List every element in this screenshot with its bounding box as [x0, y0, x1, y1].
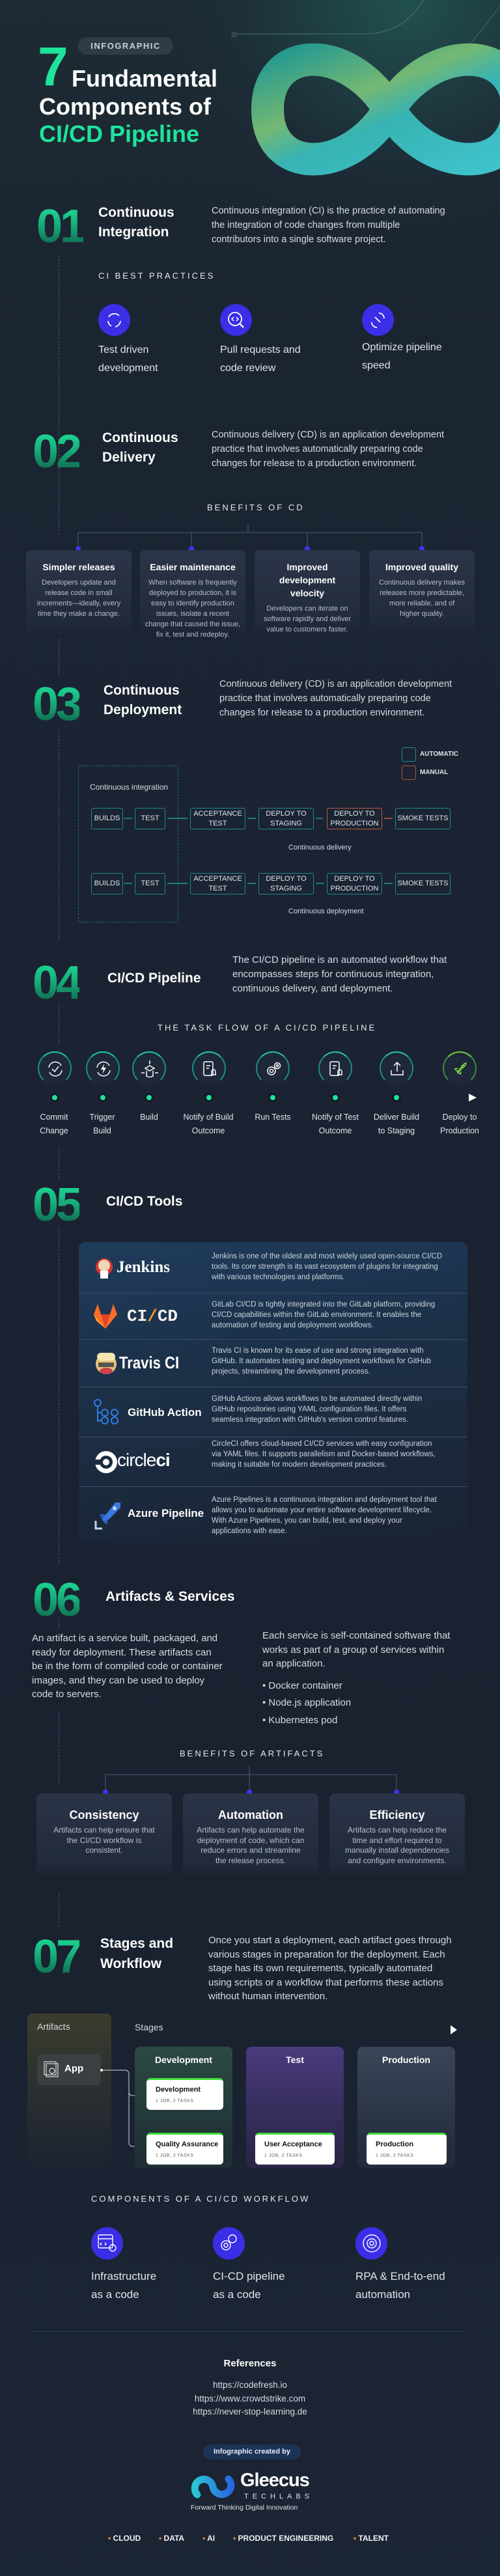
references: [193, 2358, 307, 2417]
title: Components of: [39, 93, 211, 120]
section 03 heading: Deployment: [104, 702, 182, 717]
components of CI/CD workflow: as a code: [213, 2288, 261, 2301]
tool: azure: With Azure Pipelines, you can build, test, and deploy your: [212, 1517, 402, 1525]
stage: test: Test: [286, 2055, 304, 2065]
pipeline diagram: STAGING: [270, 884, 302, 892]
section 04 heading: 04: [33, 957, 79, 1009]
tool: jenkins: [79, 1242, 467, 1294]
card: easier maintenance: Easier maintenance: [150, 562, 236, 572]
pipeline diagram: BUILDS: [94, 814, 120, 822]
task flow: [38, 1023, 477, 1102]
tool: travis: Travis CI is known for its ease of use and strong integration with: [212, 1347, 424, 1355]
section 07 heading: stage has its own requirements, typically automated: [208, 1963, 432, 1974]
section 04 heading: CI/CD Pipeline: [107, 971, 201, 986]
task flow labels: Notify of Test: [312, 1113, 359, 1122]
task flow: THE TASK FLOW OF A CI/CD PIPELINE: [158, 1023, 376, 1032]
services text: • Docker container: [262, 1680, 342, 1691]
card: easier maintenance: deployed to production, it is: [149, 589, 236, 597]
card: consistency: Artifacts can help ensure that the CI/CD workflow is consistent.: [53, 1825, 155, 1855]
tools panel: [79, 1242, 467, 1543]
section 03 heading: Continuous: [104, 683, 180, 698]
card: velocity: Developers can iterate on: [266, 605, 348, 613]
card: quality: Continuous delivery makes: [379, 579, 465, 587]
section 07 heading: 07: [33, 1931, 79, 1983]
icon: RPA: [355, 2227, 387, 2260]
task flow labels: Deploy to: [443, 1113, 477, 1122]
card: efficiency: Efficiency: [369, 1808, 425, 1821]
card: velocity: software rapidly and deliver: [264, 615, 351, 623]
credit pill: Infographic created by: [214, 2448, 290, 2456]
pipeline diagram: PRODUCTION: [331, 819, 378, 827]
services text: • Kubernetes pod: [262, 1715, 337, 1725]
tool: circleci: via YAML files. It supports parallelism and Docker-based workflows,: [212, 1450, 436, 1458]
card: simpler releases: Developers update and: [42, 579, 116, 587]
section 07 heading: Once you start a deployment, each artifact goes through: [208, 1935, 452, 1946]
section 02 heading: Continuous delivery (CD) is an application development: [212, 430, 444, 440]
card: efficiency: Artifacts can help reduce the time and effort required to manually install dependencies and configure environments.: [345, 1825, 449, 1865]
references: https://never-stop-learning.de: [193, 2407, 307, 2417]
CI best practices: [98, 271, 442, 374]
icons: [38, 1051, 72, 1085]
logo: gleecus: Forward Thinking Digital Innovation: [191, 2504, 298, 2512]
artifacts text: An artifact is a service built, packaged, and: [32, 1633, 217, 1644]
stages diagram: Stages: [135, 2022, 163, 2032]
card: consistency: [36, 1794, 172, 1876]
CI best practices: Test driven: [98, 344, 148, 355]
tool: circleci: [79, 1437, 467, 1487]
pipeline diagram: TEST: [141, 814, 160, 822]
app box: [37, 2054, 101, 2085]
section 02 heading: Continuous: [102, 430, 178, 445]
icon: pipeline as code: [213, 2227, 245, 2260]
timeline: [469, 1094, 477, 1101]
legend: MANUAL: [420, 769, 448, 776]
CI best practices: speed: [362, 360, 391, 371]
card: quality: more reliable, and of: [389, 600, 454, 607]
artifacts text: images, and they can be used to deploy: [32, 1674, 204, 1686]
card: simpler releases: time they make a change.: [38, 610, 120, 618]
title: [38, 36, 217, 147]
tool: azure: [95, 1496, 437, 1535]
section 04 heading: [33, 954, 447, 1009]
card: easier maintenance: When software is frequently: [148, 579, 237, 587]
tool: circleci: circleci: [117, 1450, 170, 1470]
pipeline diagram: [78, 766, 451, 922]
section 03 heading: practice that involves automatically preparing code: [219, 693, 431, 704]
stage: test: [246, 2047, 344, 2168]
pipeline diagram: Continuous delivery: [288, 844, 352, 852]
pipeline diagram: STAGING: [270, 819, 302, 827]
decorative hero lines: [231, 0, 500, 44]
tool: github action: GitHub repositories using YAML configuration files. It offers: [212, 1406, 406, 1413]
section 01 heading: [36, 201, 445, 253]
services text: works as part of a group of services within: [262, 1644, 444, 1655]
footer services: • DATA: [159, 2534, 184, 2543]
tool: github action: GitHub Action: [128, 1406, 202, 1419]
services text: Each service is self-contained software that: [262, 1630, 450, 1641]
task flow labels: Trigger: [89, 1113, 115, 1122]
tool: gitlab: CI/CD: [127, 1307, 178, 1326]
CI best practices: development: [98, 363, 158, 374]
pipeline diagram: TEST: [141, 879, 160, 887]
benefits of CD: [26, 503, 475, 639]
legend: [402, 747, 458, 780]
task flow labels: Production: [440, 1126, 479, 1135]
stages diagram: Production: [376, 2140, 413, 2148]
pipeline diagram: DEPLOY TO: [334, 875, 375, 883]
app box: App: [64, 2063, 83, 2074]
tool: github action: GitHub Actions allows workflows to be automated directly within: [212, 1395, 422, 1403]
task flow labels: Notify of Build: [183, 1113, 234, 1122]
section 02 heading: changes for release to a production environment.: [212, 458, 417, 469]
task flow labels: Commit: [40, 1113, 68, 1122]
card: easier maintenance: [140, 550, 245, 637]
artifacts text: ready for deployment. These artifacts can: [32, 1647, 212, 1657]
card: easier maintenance: easy to identify production: [151, 600, 234, 607]
card: velocity: value to customers faster.: [266, 626, 348, 633]
benefits of artifacts: BENEFITS OF ARTIFACTS: [180, 1749, 324, 1758]
section 03 heading: changes for release to a production environment.: [219, 708, 424, 718]
card: velocity: [255, 550, 360, 637]
title: 7: [38, 36, 68, 97]
footer services: • AI: [202, 2534, 215, 2543]
section 02 heading: Delivery: [102, 450, 156, 465]
CI best practices: code review: [220, 363, 275, 374]
tool: azure: allows you to automate your entire software development lifecycle.: [212, 1506, 432, 1514]
card: quality: [369, 550, 475, 637]
artifacts text: code to servers.: [32, 1689, 102, 1700]
tool: gitlab: CI/CD capabilities within the GitLab environment. It enables the: [212, 1311, 421, 1319]
stages diagram: Quality Assurance: [156, 2140, 218, 2148]
section 07 heading: Stages and: [100, 1936, 173, 1951]
hero background glow: [163, 0, 500, 241]
footer services: • CLOUD: [108, 2534, 141, 2543]
section 01 heading: contributors into a single software project.: [212, 234, 386, 245]
artifacts text: be in the form of compiled code or container: [32, 1661, 223, 1672]
card: easier maintenance: change that caused the issue,: [145, 620, 240, 628]
task flow labels: Build: [93, 1126, 111, 1135]
pipeline diagram: DEPLOY TO: [334, 810, 375, 818]
pipeline diagram: ACCEPTANCE: [193, 810, 242, 818]
references: References: [224, 2358, 276, 2369]
tool: travis: GitHub. It automates testing and deployment workflows for GitHub: [212, 1357, 431, 1365]
section 02 heading: 02: [33, 426, 79, 478]
pipeline diagram: BUILDS: [94, 879, 120, 887]
card: easier maintenance: fix it, test and redeploy.: [156, 631, 229, 639]
artifacts column: [27, 2014, 111, 2170]
pipeline diagram: Continuous deployment: [288, 907, 364, 915]
benefits of CD: BENEFITS OF CD: [207, 503, 305, 512]
section 06 heading: [33, 1574, 234, 1626]
footer services: [108, 2534, 389, 2543]
stages diagram: Artifacts: [37, 2021, 70, 2032]
section 07 heading: Workflow: [100, 1956, 161, 1971]
services text: [262, 1630, 451, 1725]
section 05 heading: 05: [33, 1179, 79, 1231]
card: simpler releases: increments—ideally, every: [37, 600, 120, 607]
tool: azure: applications with ease.: [212, 1527, 287, 1535]
components of CI/CD workflow: Infrastructure: [91, 2270, 156, 2282]
pipeline diagram: SMOKE TESTS: [397, 814, 449, 822]
card: quality: higher quality.: [400, 610, 444, 618]
icon: pull requests: [220, 304, 252, 336]
components of CI/CD workflow: [91, 2194, 445, 2301]
card: velocity: development: [279, 575, 335, 585]
section 04 heading: The CI/CD pipeline is an automated workflow that: [232, 954, 447, 965]
section 02 heading: practice that involves automatically preparing code: [212, 444, 423, 454]
pipeline diagram: DEPLOY TO: [266, 810, 307, 818]
pipeline diagram: Continuous integration: [90, 782, 168, 792]
card: quality: releases more predictable,: [380, 589, 464, 597]
card: automation: Artifacts can help automate the deployment of code, which can reduce errors and streamline the release process.: [197, 1825, 305, 1865]
section 03 heading: 03: [33, 678, 79, 730]
pipeline diagram: TEST: [208, 884, 227, 892]
artifacts text: [32, 1633, 223, 1700]
section 07 heading: using scripts or a workflow that performs these actions: [208, 1977, 443, 1988]
task flow labels: Outcome: [319, 1126, 352, 1135]
card: automation: Automation: [218, 1808, 283, 1821]
task flow labels: Outcome: [192, 1126, 225, 1135]
tool: travis: projects, streamlining the development process.: [212, 1368, 370, 1376]
stages diagram: 1 JOB, 2 TASKS: [264, 2154, 302, 2158]
divider: [31, 2331, 467, 2332]
section 01 heading: the integration of code changes from multiple: [212, 220, 400, 230]
logo: gleecus: TECHLABS: [244, 2493, 313, 2500]
tool: circleci: making it suitable for modern development practices.: [212, 1461, 387, 1469]
references: https://codefresh.io: [213, 2380, 287, 2390]
card: simpler releases: [26, 550, 132, 637]
logo: gleecus: [191, 2470, 313, 2512]
components of CI/CD workflow: CI-CD pipeline: [213, 2270, 285, 2282]
CI best practices: Pull requests and: [220, 344, 301, 355]
section 01 heading: Continuous: [98, 205, 174, 220]
tag: infographic: INFOGRAPHIC: [90, 41, 161, 51]
stages diagram: User Acceptance: [264, 2140, 322, 2148]
tool: gitlab: [79, 1294, 467, 1340]
tool: jenkins: Jenkins is one of the oldest and most widely used open-source CI/CD: [212, 1253, 442, 1260]
credit pill: [203, 2444, 301, 2459]
CI best practices: CI BEST PRACTICES: [98, 271, 215, 281]
tool: gitlab: automation of testing and deployment workflows.: [212, 1322, 374, 1329]
title: Fundamental: [72, 65, 217, 92]
footer services: • TALENT: [354, 2534, 389, 2543]
card: velocity: Improved: [286, 562, 328, 572]
stages diagram: 1 JOB, 2 TASKS: [376, 2154, 414, 2158]
stages diagram: 1 JOB, 2 TASKS: [156, 2099, 194, 2103]
icon: test driven: [98, 304, 130, 336]
icon: optimize: [362, 304, 394, 336]
card: quality: Improved quality: [385, 562, 458, 572]
references: https://www.crowdstrike.com: [195, 2394, 305, 2403]
tool: jenkins: tools. Its core strength is its vast ecosystem of plugins for integrating: [212, 1263, 438, 1271]
footer services: • PRODUCT ENGINEERING: [233, 2534, 333, 2543]
section 07 heading: without human intervention.: [208, 1991, 327, 2002]
section 07 heading: various stages in preparation for the deployment. Each: [208, 1949, 445, 1960]
CI best practices: Optimize pipeline: [362, 342, 442, 353]
stages diagram: [27, 2014, 457, 2168]
tool: jenkins: with various technologies and platforms.: [212, 1273, 345, 1281]
components of CI/CD workflow: as a code: [91, 2288, 139, 2301]
section 03 heading: Continuous delivery (CD) is an application development: [219, 679, 452, 689]
section 06 heading: 06: [33, 1574, 79, 1626]
tool: gitlab: GitLab CI/CD is tightly integrated into the GitLab platform, providing: [212, 1301, 435, 1309]
components of CI/CD workflow: automation: [355, 2288, 410, 2301]
pipeline diagram: ACCEPTANCE: [193, 875, 242, 883]
stages diagram: 1 JOB, 2 TASKS: [156, 2154, 194, 2158]
card: easier maintenance: issues, isolate a recent: [156, 610, 229, 618]
stage: production: Production: [382, 2055, 430, 2065]
services text: • Node.js application: [262, 1697, 351, 1708]
card: consistency: Consistency: [69, 1808, 139, 1821]
section 01 heading: 01: [36, 201, 83, 253]
tool: circleci: CircleCI offers cloud-based CI/CD services with easy configuration: [212, 1440, 432, 1448]
stages diagram: Development: [156, 2086, 201, 2094]
section 05 heading: [33, 1179, 182, 1231]
pipeline diagram: PRODUCTION: [331, 884, 378, 892]
pipeline diagram: DEPLOY TO: [266, 875, 307, 883]
tool: azure: Azure Pipeline: [128, 1507, 204, 1519]
benefits of artifacts: [36, 1749, 465, 1866]
logo: gleecus: Gleecus: [240, 2470, 309, 2491]
card: simpler releases: release code in small: [45, 589, 113, 597]
section 04 heading: continuous delivery, and deployment.: [232, 983, 393, 994]
tool: github action: [79, 1387, 467, 1437]
section 05 heading: CI/CD Tools: [106, 1194, 182, 1209]
section 02 heading: [33, 426, 444, 478]
task flow labels: [40, 1113, 479, 1135]
tool: travis: [79, 1340, 467, 1387]
services text: an application.: [262, 1658, 326, 1669]
tag: infographic: [78, 37, 173, 55]
legend: AUTOMATIC: [420, 751, 458, 758]
task flow labels: Build: [140, 1113, 158, 1122]
pipeline diagram: TEST: [208, 819, 227, 827]
section 06 heading: Artifacts & Services: [105, 1589, 234, 1604]
hero infinity graphic: [251, 43, 500, 176]
components of CI/CD workflow: COMPONENTS OF A CI/CD WORKFLOW: [91, 2194, 310, 2204]
card: efficiency: [329, 1794, 465, 1876]
section 01 heading: Continuous integration (CI) is the practice of automating: [212, 206, 445, 216]
card: automation: [183, 1794, 318, 1876]
title: CI/CD Pipeline: [39, 120, 199, 147]
tool: github action: seamless integration with GitHub's version control features.: [212, 1416, 408, 1424]
task flow labels: Change: [40, 1126, 68, 1135]
stage: development: Development: [155, 2055, 212, 2065]
components of CI/CD workflow: RPA & End-to-end: [355, 2270, 445, 2282]
tool: azure: Azure Pipelines is a continuous integration and deployment tool that: [212, 1496, 437, 1504]
pipeline diagram: SMOKE TESTS: [397, 879, 449, 887]
card: velocity: velocity: [290, 588, 324, 598]
tool: jenkins: Jenkins: [117, 1258, 170, 1276]
section 03 heading: [33, 678, 452, 730]
section 01 heading: Integration: [98, 225, 169, 240]
icon: infrastructure: [91, 2227, 123, 2260]
card: simpler releases: Simpler releases: [42, 562, 115, 572]
task flow labels: Deliver Build: [374, 1113, 419, 1122]
stage: development: [135, 2047, 232, 2168]
task flow labels: Run Tests: [255, 1113, 291, 1122]
task flow labels: to Staging: [378, 1126, 415, 1135]
tool: travis: Travis CI: [119, 1353, 179, 1372]
stage: production: [357, 2047, 455, 2168]
section 07 heading: [33, 1931, 452, 2002]
section 04 heading: encompasses steps for continuous integration,: [232, 969, 434, 980]
